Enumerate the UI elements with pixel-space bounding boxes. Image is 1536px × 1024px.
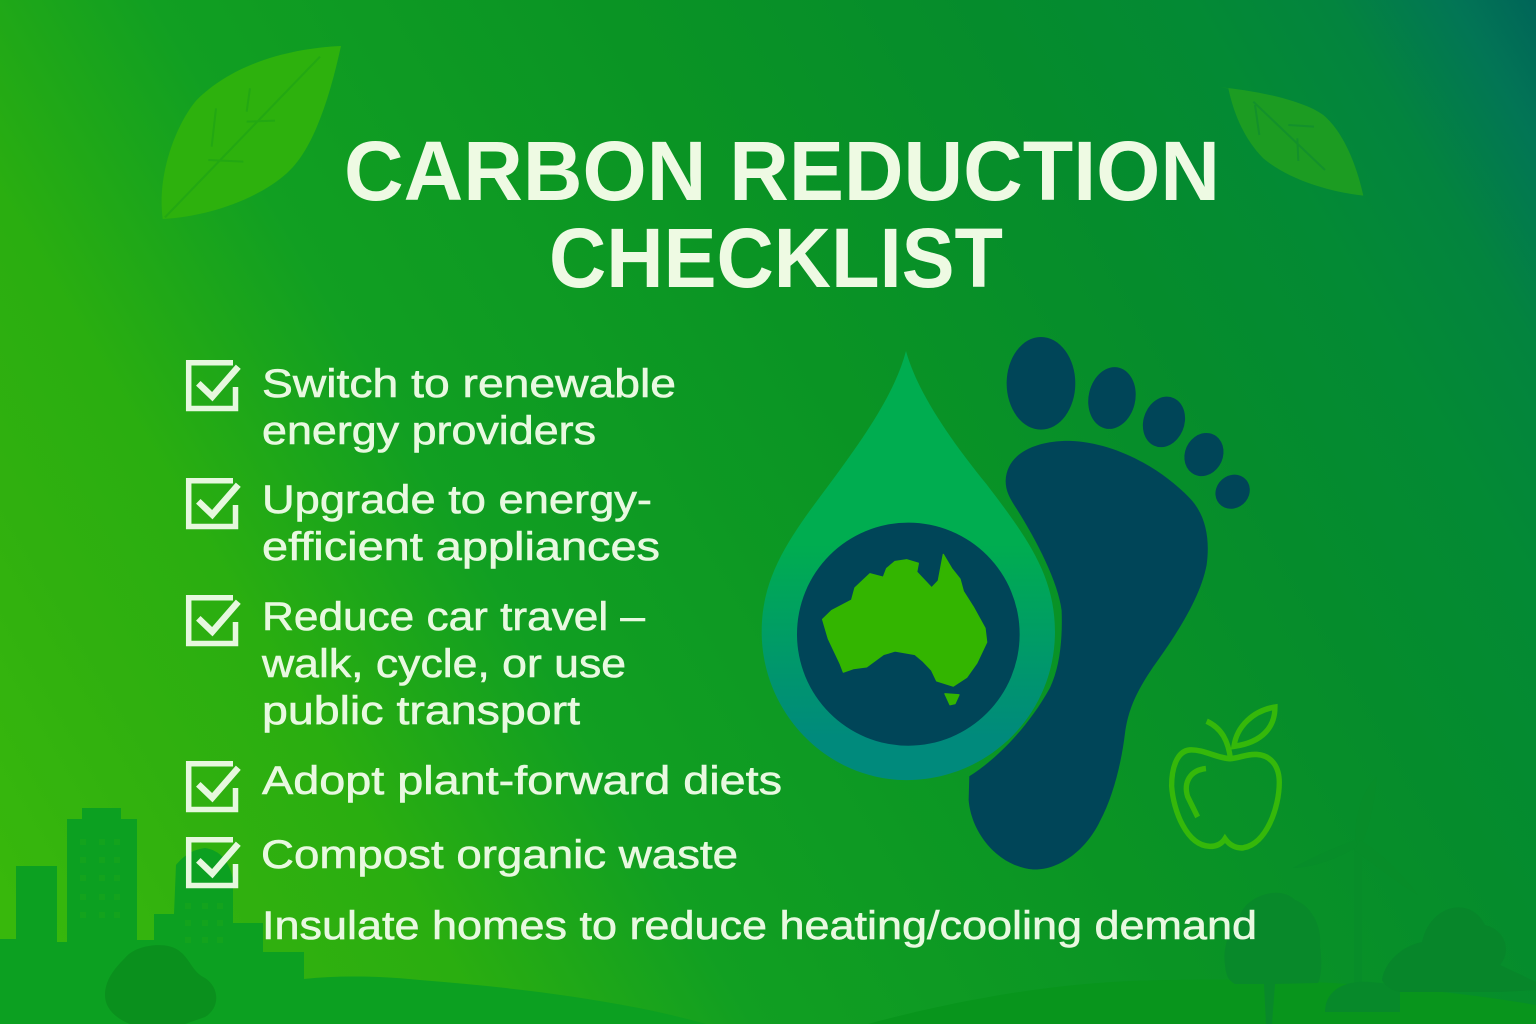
title — [344, 124, 1220, 305]
icon: apple — [1172, 707, 1279, 848]
right ground hill — [868, 980, 1536, 1024]
city skyline silhouette — [0, 808, 706, 1024]
water drop with Australia — [762, 351, 1055, 780]
item 3: reduce car travel — [189, 595, 646, 733]
leaf top right — [1220, 87, 1363, 196]
title: CHECKLIST — [549, 211, 1003, 305]
item 2: efficient appliances: Upgrade to energy- — [262, 478, 652, 522]
item 1: renewable energy: Switch to renewable — [262, 362, 676, 406]
item 3: reduce car travel: Reduce car travel – — [262, 595, 646, 639]
title: CARBON REDUCTION — [344, 124, 1220, 218]
footprint icon — [969, 337, 1256, 870]
item 5: compost: Compost organic waste — [261, 833, 738, 877]
globe circle — [797, 523, 1020, 746]
item 4: plant-forward diets: Adopt plant-forward diets — [262, 759, 782, 803]
checklist — [189, 362, 1257, 948]
item 4: plant-forward diets — [189, 759, 782, 810]
item 2: efficient appliances — [189, 478, 660, 569]
wind turbine — [1293, 777, 1418, 985]
item 3: reduce car travel: walk, cycle, or use — [261, 642, 626, 686]
item 5: compost — [189, 833, 738, 886]
drop — [762, 351, 1055, 780]
leaf top left — [162, 46, 341, 219]
item 6: insulate homes: Insulate homes to reduce heating/cooling demand — [262, 904, 1257, 948]
item 1: renewable energy: energy providers — [262, 409, 596, 453]
right background trees and wind turbine — [1224, 777, 1536, 1024]
item 3: reduce car travel: public transport — [262, 689, 580, 733]
item 2: efficient appliances: efficient appliances — [262, 525, 660, 569]
item 1: renewable energy — [189, 362, 676, 453]
left tree silhouette — [105, 945, 216, 1024]
building windows — [80, 839, 223, 943]
map of Australia — [823, 555, 987, 705]
